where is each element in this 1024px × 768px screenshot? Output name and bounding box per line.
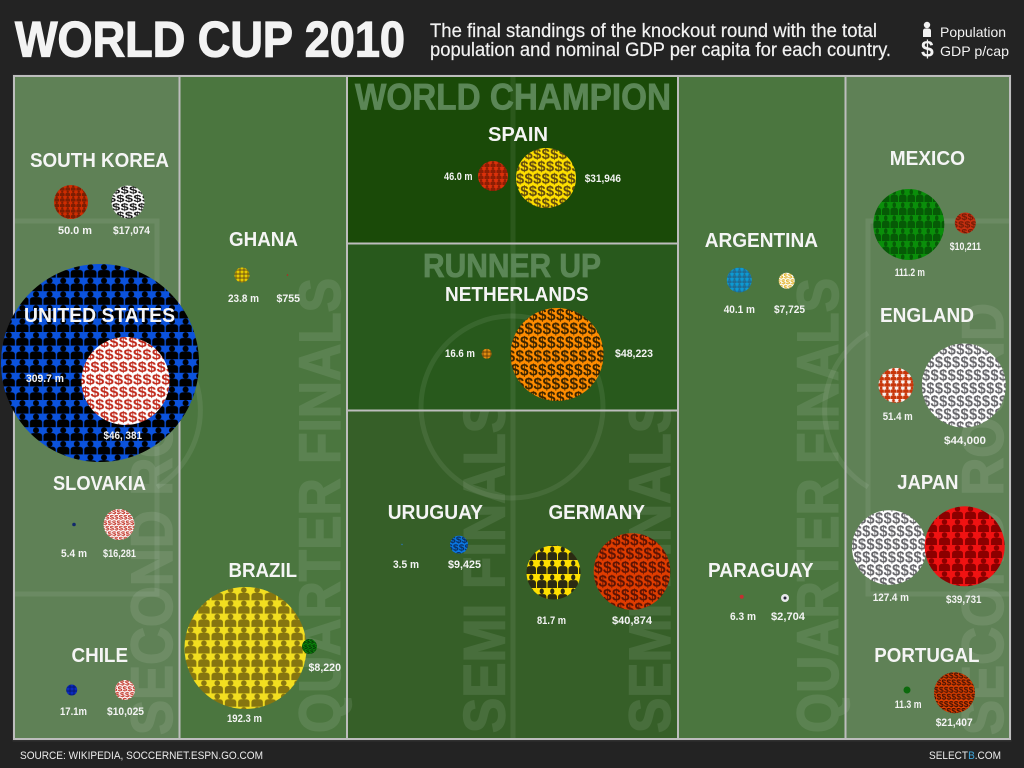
panel: South Korea: $17,074 — [113, 225, 151, 237]
panel: Netherlands: NETHERLANDS — [445, 284, 588, 306]
subtitle text block — [430, 21, 891, 61]
panel: Netherlands — [445, 284, 653, 401]
panel: South Korea: SOUTH KOREA — [30, 150, 169, 172]
panel: England — [878, 305, 1006, 447]
panel: Mexico: $10,211 — [950, 241, 981, 253]
heading: world champion: WORLD CHAMPION — [355, 76, 671, 118]
watermark: quarter finals right: QUARTER FINALS — [786, 278, 851, 733]
panel: South Korea — [30, 150, 169, 237]
panel: Japan: JAPAN — [897, 472, 958, 494]
panel: Spain: 46.0 m — [444, 171, 473, 183]
panel: Brazil: BRAZIL — [228, 560, 297, 582]
panel: Spain — [444, 124, 621, 208]
panel: Paraguay — [708, 560, 814, 623]
panel: Argentina: $7,725 — [774, 304, 805, 316]
panel: Netherlands: $48,223 — [615, 348, 653, 360]
panel: United States: UNITED STATES — [24, 305, 175, 327]
panel: Ghana — [228, 229, 300, 305]
panel: Paraguay: $2,704 — [771, 611, 806, 623]
legend: Population — [940, 24, 1006, 40]
panel: Argentina: 40.1 m — [724, 304, 755, 316]
panel: Japan: $39,731 — [946, 594, 982, 606]
legend — [921, 22, 1009, 62]
panel: Uruguay: $9,425 — [448, 559, 481, 571]
panel: Mexico — [873, 148, 981, 279]
panel: Portugal: PORTUGAL — [874, 645, 980, 667]
watermark: quarter finals left: QUARTER FINALS — [288, 278, 353, 733]
panel: Netherlands: 16.6 m — [445, 348, 475, 360]
watermark: second round left: SECOND ROUND — [120, 303, 185, 735]
panel: Uruguay: 3.5 m — [393, 559, 419, 571]
panel: Uruguay: URUGUAY — [388, 502, 484, 524]
panel: Brazil: $8,220 — [308, 662, 341, 674]
icon: population person — [923, 22, 931, 37]
watermark: second round right: SECOND ROUND — [951, 303, 1016, 735]
panel: England: ENGLAND — [880, 305, 974, 327]
panel: Germany: GERMANY — [548, 502, 646, 524]
panel: Chile — [60, 645, 144, 718]
panel: England: 51.4 m — [883, 411, 913, 423]
panel: Chile: CHILE — [72, 645, 128, 667]
title: WORLD CUP 2010 — [15, 12, 405, 68]
panel: Chile: $10,025 — [107, 706, 144, 718]
panel: Mexico: 111.2 m — [895, 267, 925, 279]
heading: runner up: RUNNER UP — [423, 247, 601, 284]
panel: Japan: 127.4 m — [873, 592, 909, 604]
panel: Germany: $40,874 — [612, 615, 653, 627]
panel: Japan — [852, 472, 1005, 606]
panel: Spain: SPAIN — [488, 124, 548, 146]
panel: Portugal — [874, 645, 980, 729]
panel: Uruguay — [388, 502, 484, 571]
panel: Paraguay: PARAGUAY — [708, 560, 814, 582]
panel: Portugal: $21,407 — [936, 717, 973, 729]
panel: Germany: 81.7 m — [537, 615, 566, 627]
panel: Brazil: 192.3 m — [227, 713, 262, 725]
subtitle text block: The final standings of the knockout round with the total — [430, 21, 877, 42]
source footer: SOURCE: WIKIPEDIA, SOCCERNET.ESPN.GO.COM — [20, 750, 263, 762]
subtitle text block: population and nominal GDP per capita for each country. — [430, 40, 891, 61]
watermark: semi finals: SEMI FINALS — [618, 398, 683, 733]
panel: Argentina — [705, 230, 818, 316]
legend: $ — [921, 36, 934, 62]
panel: United States — [1, 264, 199, 462]
panel: Mexico: MEXICO — [890, 148, 965, 170]
panel: Portugal: 11.3 m — [895, 699, 922, 711]
panel: South Korea: 50.0 m — [58, 225, 92, 237]
panel: Slovakia: $16,281 — [103, 548, 136, 560]
panel: Ghana: $755 — [276, 293, 300, 305]
legend: GDP p/cap — [940, 43, 1009, 59]
panel: Brazil — [184, 560, 341, 725]
panel: Paraguay: 6.3 m — [730, 611, 756, 623]
panel: Ghana: GHANA — [229, 229, 298, 251]
panel: Chile: 17.1m — [60, 706, 87, 718]
watermark: semi finals: SEMI FINALS — [452, 398, 518, 733]
panel: Slovakia: SLOVAKIA — [53, 473, 146, 495]
panel: Spain: $31,946 — [585, 173, 621, 185]
watermark: semi finals — [463, 412, 671, 732]
credit footer: SELECTB.COM — [929, 750, 1001, 762]
panel: England: $44,000 — [944, 435, 986, 447]
panel: Germany — [526, 502, 670, 627]
panel: United States: $46, 381 — [104, 430, 142, 442]
panel: Ghana: 23.8 m — [228, 293, 259, 305]
panel: United States: 309.7 m — [26, 373, 64, 385]
panel: Argentina: ARGENTINA — [705, 230, 818, 252]
panel: Slovakia: 5.4 m — [61, 548, 87, 560]
panel: Slovakia — [53, 473, 146, 560]
